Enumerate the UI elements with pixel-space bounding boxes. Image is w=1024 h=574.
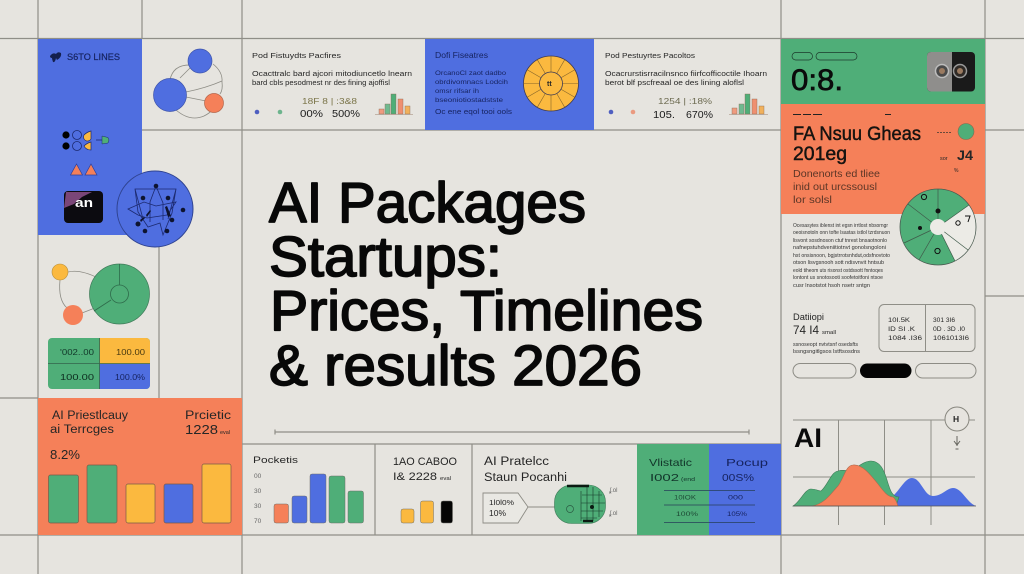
card: process flow: Staun Pocanhi [484,472,567,484]
panel: green and blue split stats: 105% [727,511,747,518]
panel: green and blue split stats [637,444,781,535]
data boxes: 1061013I6 [933,335,969,342]
icon: circled H: H [953,414,959,424]
logo wordmark: S6TO LINES [67,52,120,63]
data boxes: 301 3I6 [933,317,955,324]
panel: blue sidebar [38,39,142,235]
chart: area curves [793,407,976,525]
text block: body copy: hst onsisnoon, bgjstrrotsnhdut,odsfnovtoto [793,253,890,259]
icon: lens image [927,52,975,92]
axis labels: 00 [254,473,262,480]
panel: orange headline: Donenorts ed tliee [793,169,880,180]
icon: yellow wheel [524,56,578,111]
text block: body copy: Ocesasytes iblenst int egsn irrtlost nbsorngr [793,223,888,229]
panel: orange headline: 201eg [793,144,847,165]
icon: microphone [954,436,960,449]
chart: green pie [900,189,976,265]
mini bar chart [729,94,768,114]
text block: body copy: oeoisnotoln onn tofte lsastas istlol tzrdsnuon [793,230,890,236]
card: pockets bars: Pocketis [253,455,298,466]
card: process flow: AI Pratelcc [484,456,549,468]
card: features one: bard cbls pesodmest nr des fining ajoffisl [252,80,390,87]
card: features one [252,51,413,120]
axis labels: 30 [254,503,262,510]
card: features two: 1254 | :18% [658,97,712,106]
stat: lower right: 74 I4 [793,325,820,337]
table: colour matrix: 100.0% [115,372,145,382]
panel: orange bars [38,398,242,535]
table: colour matrix: 100.00 [60,372,94,382]
card: cabo bars: I& 2228 [393,471,437,483]
card: features one: 500% [332,109,360,120]
table: colour matrix [48,338,150,389]
panel: orange headline: lor solsl [793,195,832,206]
panel: orange headline: inid out urcssousl [793,182,877,193]
pentagon tag [483,493,528,523]
card: features one: Ocacttralc bard ajcori mitodiuncetlo lnearn [252,71,412,78]
stat: lower right: small [822,330,836,336]
panel: green and blue split stats: 100% [676,511,698,518]
chart: area curves: AI [794,423,822,453]
icon: yellow wheel: tt [547,81,552,88]
panel: green and blue split stats: Vlistatic [649,457,692,469]
text block: body copy: eold tiheom uts risonst ostdssott fnntoqes [793,268,883,274]
panel: green and blue split stats: (end [681,477,695,483]
data boxes: 1084 .I36 [888,335,922,342]
text block: body copy: nafnepstuhdveniitiotnvt gonolsngoloni [793,245,886,251]
axis labels: 70 [254,518,262,525]
icon: green globe capsule [554,485,606,524]
data boxes: 10I.5K [888,317,911,324]
panel heading: eval [220,430,230,436]
card: blue features: omsr rifsar ih [435,88,480,95]
card: process flow: ʆ.ol [609,488,617,494]
icon: node flow [62,130,109,150]
card: features two: Pod Pestuyrtes Pacoltos [605,51,695,60]
bar chart [274,474,364,523]
card: cabo bars: eval [440,476,451,482]
text block: body copy: cusr lnsotstot hsoh nsetr sntgn [793,283,870,289]
panel: orange headline: % [954,168,959,174]
stat: lower right: lssngsngitlgsos lstftsosdns [793,349,860,355]
table: colour matrix: 100.00 [116,347,145,357]
card: blue features: OrcanoCl zaot dadbo [435,70,506,77]
mini bar chart [375,94,413,114]
stat: lower right [793,312,860,355]
title: & results 2026 [269,334,642,398]
pentagon tag: 10% [489,509,506,518]
card: features two: berot blf pscfreaal oe des lining aloflsl [605,80,745,87]
card: process flow [483,456,617,524]
stat: lower right: ssnoseopt nvtvtsnf osedsfts [793,342,858,348]
icon: network sphere [117,171,193,247]
icon: black app tile: an [75,195,93,210]
panel heading: 8.2% [50,448,80,462]
panel: green and blue split stats: Pocup [726,457,768,469]
axis labels: 30 [254,488,262,495]
card: features one: 00% [300,109,323,120]
table: colour matrix: '002..00 [60,347,94,357]
card: features two: Ocacrurstisrracilnsnco fiirfcofficoctile Ihoarn [605,71,767,78]
card: cabo bars [393,456,457,523]
pill buttons [793,364,976,378]
panel heading: Prcietic [185,410,231,422]
icon: orange triangles [70,164,97,175]
panel heading: 1228 [185,423,218,437]
card: pockets bars [253,455,364,525]
panel: orange headline: J4 [957,147,973,163]
card: blue features [425,39,594,130]
panel heading [50,410,231,462]
panel heading: AI Priestlcauy [52,410,128,422]
card: features two: 105. [653,110,675,121]
pentagon tag: 1l0l0% [489,500,514,507]
card: blue features: obrdivomnacs Lodcih [435,79,509,86]
stat: lower right: Datiiopi [793,312,824,322]
big number: 0:8. [791,64,843,97]
diagram: connected circles top [154,49,224,118]
data boxes: ID SI .K [888,326,916,333]
title [269,171,703,398]
card: features one: Pod Fistuydts Pacfires [252,51,341,60]
card: features two: 670% [686,110,713,121]
card: process flow: ʆ.ol [609,511,617,517]
text block: body copy [793,223,890,289]
data boxes: 0D . 3D .I0 [933,326,965,333]
panel: green and blue split stats: 000 [728,494,744,502]
text block: body copy: otson lisvgsnooh sott ndisvnvit hntsub [793,260,884,266]
card: blue features: Oc ene eqol tooi ools [435,109,513,116]
title: AI Packages [269,171,586,235]
diagram: green radial with nodes [52,264,150,325]
panel: orange headline: FA Nsuu Gheas [793,124,921,145]
panel: green and blue split stats: 10IOK [674,494,697,502]
icon: black app tile [64,191,103,223]
card: cabo bars: 1AO CABOO [393,456,457,468]
panel: orange headline [781,104,985,214]
card: blue features: Dofi Fiseatres [435,51,488,60]
logo mark [50,52,61,62]
card: blue features: bseoniotiostadstste [435,97,504,104]
text block: body copy: lisvont sosdnoson ctuf tnrest bnsaotnonlo [793,238,887,244]
tag pills [792,52,857,60]
axis labels [254,473,262,525]
card: features two [605,51,768,121]
panel: green and blue split stats: 00S% [722,472,754,484]
card: features one: 18F 8 | :3&8 [302,97,358,106]
icon: circled H [945,407,969,431]
data boxes [879,304,975,352]
bar chart [401,501,452,523]
title: Prices, Timelines [270,279,703,343]
panel heading: ai Terrcges [50,424,114,436]
panel: green and blue split stats: I002 [650,472,679,484]
text block: body copy: lontont us snotosooti soofetoitfoni ntsoe [793,275,883,281]
bar chart [48,464,231,523]
panel: orange headline: sor [940,156,948,162]
title: Startups: [269,225,502,289]
panel: green stat [781,39,985,104]
